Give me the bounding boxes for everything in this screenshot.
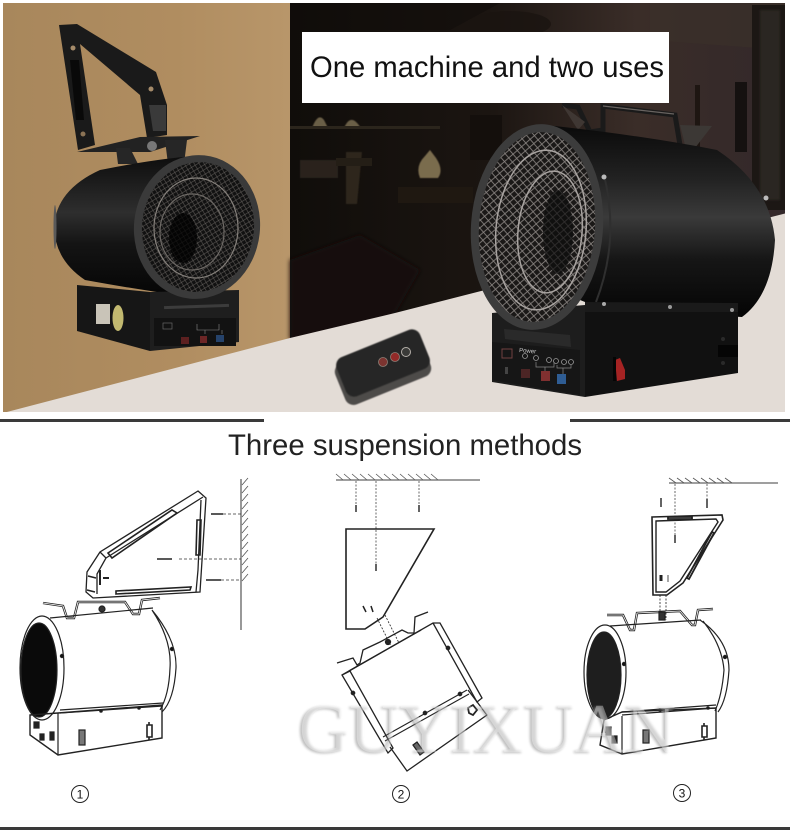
- control box: [492, 302, 738, 397]
- diagram 3: suspended mounting: [584, 478, 778, 802]
- control box: Power: [519, 348, 536, 355]
- wall bracket: [59, 24, 200, 164]
- bracket: [346, 529, 434, 629]
- headline text: One machine and two uses: [310, 51, 664, 84]
- barrel: [54, 156, 197, 298]
- diagram 1: wall mounting: [20, 478, 248, 802]
- watermark: GUYIXUAN: [297, 692, 674, 769]
- number 3: [674, 784, 690, 802]
- front grille: [464, 120, 610, 334]
- heater body: [337, 612, 487, 771]
- front grille: [127, 149, 267, 305]
- handle: [562, 105, 712, 148]
- divider bars: [0, 419, 790, 422]
- section heading: Three suspension methods: [228, 429, 582, 462]
- floor: [3, 213, 787, 413]
- bracket: [86, 491, 206, 598]
- bracket: [652, 515, 723, 620]
- remote control: [332, 327, 434, 408]
- number 2: [392, 786, 410, 802]
- ceiling: [661, 478, 778, 543]
- barrel: [545, 125, 775, 317]
- heater body: [584, 609, 729, 754]
- remote buttons: [378, 348, 410, 366]
- heater body: [20, 598, 176, 755]
- number 1: [72, 786, 88, 802]
- bottom bar: [0, 827, 790, 830]
- photo panel: heater use scenes: [0, 0, 790, 419]
- heater on wall with bracket: [54, 24, 267, 351]
- wall: [157, 478, 248, 630]
- number 1: 1: [77, 788, 84, 802]
- wood wall background: [3, 3, 290, 413]
- control box: [77, 285, 239, 351]
- headline box: [302, 32, 669, 103]
- ceiling: [336, 474, 480, 571]
- number 3: 3: [679, 786, 686, 800]
- diagram 2: ceiling mounting: [336, 474, 487, 802]
- dark room background: [290, 3, 785, 343]
- watermark: GUYIXUAN: [299, 691, 676, 768]
- standing heater: [464, 105, 775, 397]
- number 2: 2: [398, 788, 405, 802]
